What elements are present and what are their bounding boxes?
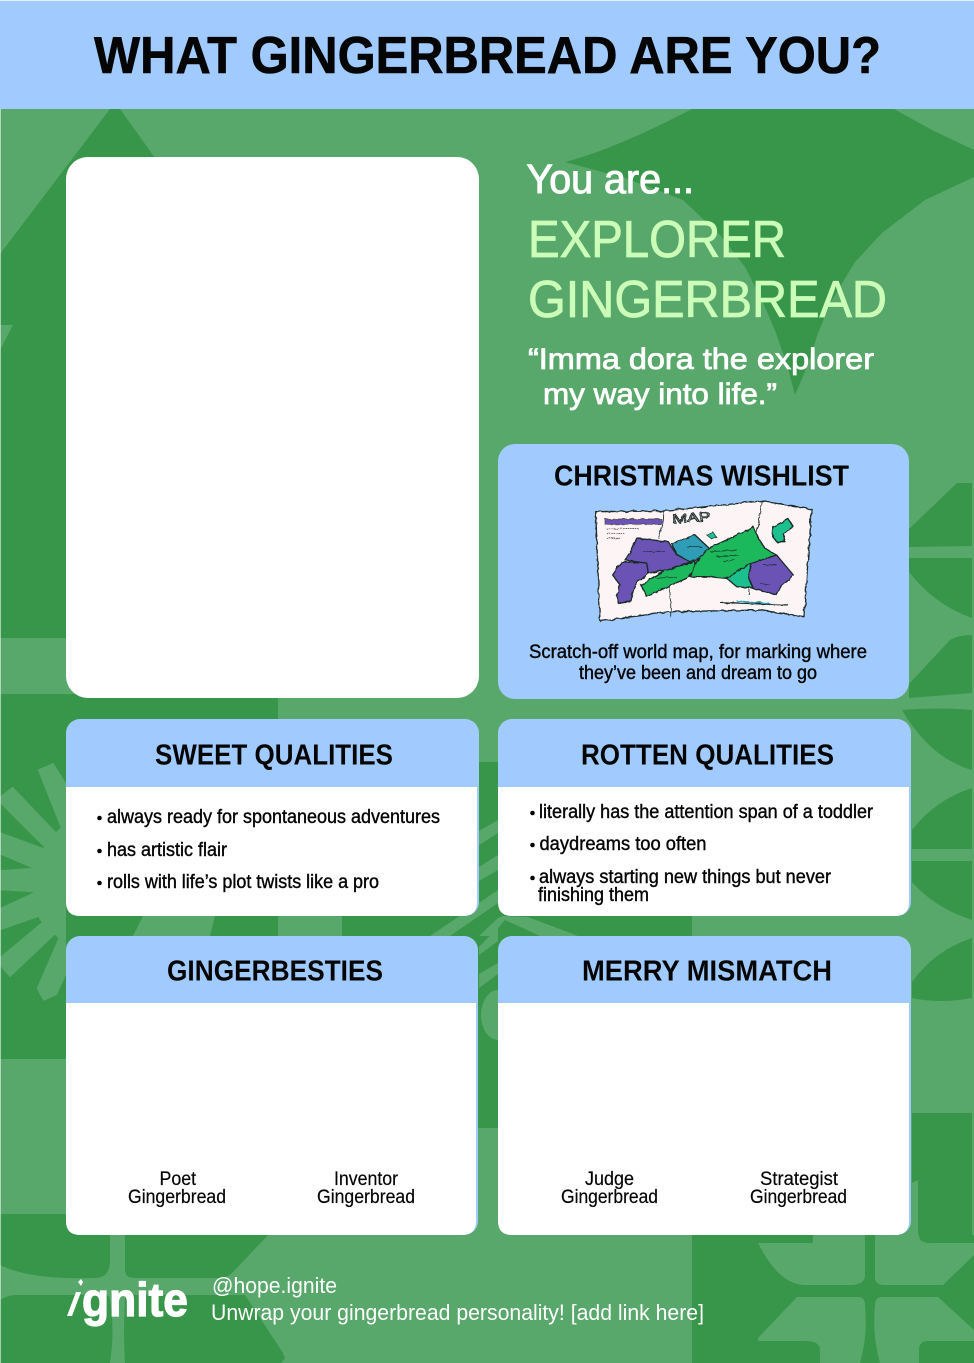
label: poet gingerbread: Poet [160, 1169, 197, 1190]
panel: merry mismatch [498, 936, 911, 1235]
icon: world map: MAP [672, 510, 711, 526]
label: strategist gingerbread: Gingerbread [750, 1187, 847, 1208]
footer text [211, 1273, 704, 1325]
list: rotten qualities: daydreams too often [540, 833, 706, 855]
label: judge gingerbread: Gingerbread [561, 1187, 658, 1208]
quote: “Imma dora the explorer [528, 343, 874, 376]
panel: christmas wishlist [498, 444, 909, 699]
quote: my way into life.” [543, 378, 777, 411]
footer text: @hope.ignite [212, 1273, 337, 1298]
label: inventor gingerbread [317, 1169, 415, 1208]
list: rotten qualities: literally has the attention span of a toddler [539, 801, 873, 823]
wishlist description: they’ve been and dream to go [579, 662, 817, 684]
panel: rotten qualities [498, 719, 911, 916]
label: strategist gingerbread [750, 1169, 847, 1208]
icon: world map [596, 501, 812, 621]
personality name [528, 211, 887, 329]
label: strategist gingerbread: Strategist [760, 1169, 839, 1190]
label: inventor gingerbread: Gingerbread [317, 1187, 415, 1208]
list: rotten qualities: always starting new things but never [539, 866, 831, 888]
personality name: GINGERBREAD [528, 271, 887, 329]
logo: ignite: gnite [82, 1273, 188, 1326]
heading: gingerbesties: GINGERBESTIES [167, 956, 383, 988]
heading: merry mismatch: MERRY MISMATCH [582, 956, 832, 988]
list: rotten qualities [530, 801, 873, 906]
label: judge gingerbread: Judge [585, 1169, 634, 1190]
intro text: You are... [526, 156, 694, 202]
panel: gingerbesties [66, 936, 478, 1235]
list: sweet qualities: has artistic flair [107, 839, 227, 861]
list: sweet qualities: always ready for spontaneous adventures [107, 806, 440, 828]
heading: rotten qualities: ROTTEN QUALITIES [581, 740, 834, 772]
label: inventor gingerbread: Inventor [334, 1169, 399, 1190]
wishlist description: Scratch-off world map, for marking where [529, 641, 867, 663]
label: poet gingerbread: Gingerbread [128, 1187, 226, 1208]
personality name: EXPLORER [528, 211, 786, 269]
quote [528, 343, 874, 411]
panel: sweet qualities [66, 719, 479, 916]
list: sweet qualities [97, 806, 440, 893]
list: sweet qualities: rolls with life’s plot twists like a pro [107, 871, 379, 893]
wishlist description [529, 641, 867, 684]
list: rotten qualities: finishing them [538, 884, 649, 906]
title bar [0, 0, 974, 109]
label: judge gingerbread [561, 1169, 658, 1208]
result heading block [526, 156, 887, 411]
footer text: Unwrap your gingerbread personality! [add link here] [211, 1300, 704, 1325]
label: poet gingerbread [128, 1169, 226, 1208]
heading: christmas wishlist: CHRISTMAS WISHLIST [554, 460, 849, 492]
panel: character image placeholder [66, 157, 479, 698]
title: WHAT GINGERBREAD ARE YOU? [94, 27, 881, 85]
heading: sweet qualities: SWEET QUALITIES [155, 740, 393, 772]
